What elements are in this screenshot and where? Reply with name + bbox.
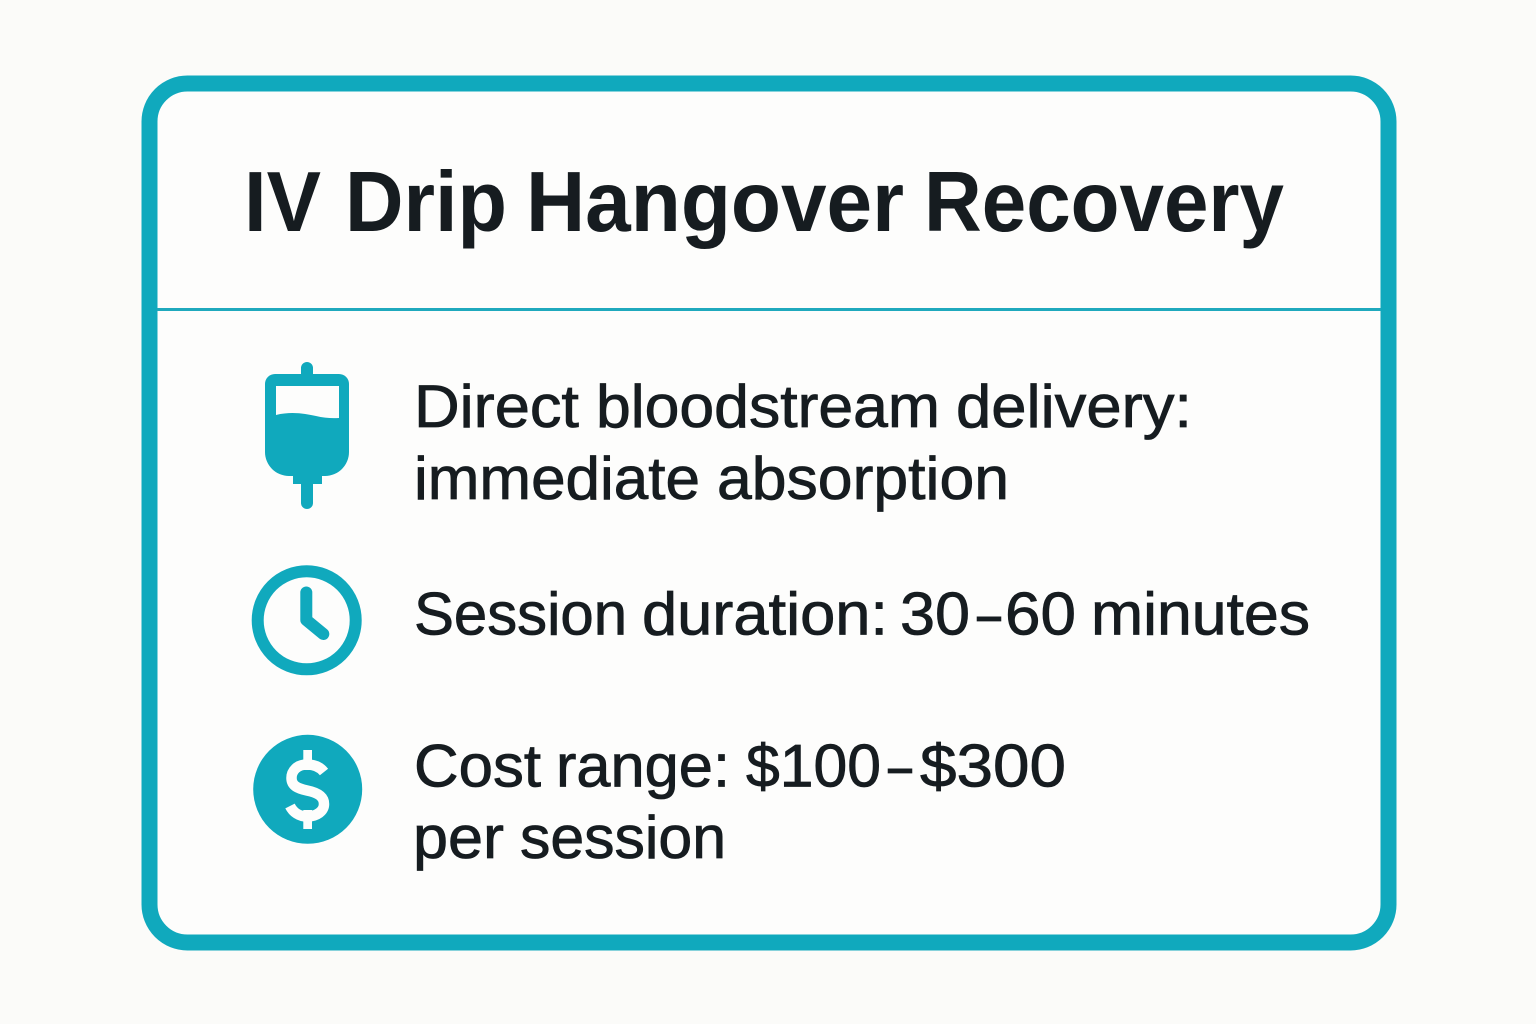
- icon: clock: [258, 571, 356, 669]
- text: cost range: –: [888, 732, 912, 800]
- icon: dollar coin: [253, 735, 362, 844]
- text: session duration: 30: [900, 580, 970, 648]
- text: session duration: Session: [414, 580, 627, 648]
- title: Recovery: [924, 155, 1284, 250]
- text: cost range: per: [413, 804, 504, 871]
- text: cost range: Cost: [414, 732, 541, 800]
- text: session duration: –: [977, 580, 1001, 648]
- text: direct bloodstream delivery: [414, 373, 1192, 512]
- title: Hangover: [526, 155, 904, 250]
- text: cost range: range:: [556, 732, 730, 800]
- text: cost range: $300: [920, 732, 1066, 800]
- text: cost range: session: [520, 804, 726, 871]
- icon: IV bag: [265, 362, 349, 509]
- text: direct bloodstream delivery: delivery:: [956, 373, 1192, 440]
- title: IV: [244, 155, 321, 250]
- text: direct bloodstream delivery: immediate: [414, 445, 700, 512]
- text: session duration: 60: [1005, 580, 1076, 648]
- text: cost range: $100: [746, 732, 881, 800]
- text: direct bloodstream delivery: bloodstream: [596, 373, 940, 440]
- panel: card frame: [150, 84, 1388, 942]
- text: direct bloodstream delivery: absorption: [717, 445, 1009, 512]
- text: cost range: [413, 732, 1066, 871]
- text: direct bloodstream delivery: Direct: [414, 373, 579, 440]
- text: session duration: minutes: [1091, 580, 1310, 648]
- text: session duration: duration:: [642, 580, 888, 648]
- title: Drip: [345, 155, 507, 250]
